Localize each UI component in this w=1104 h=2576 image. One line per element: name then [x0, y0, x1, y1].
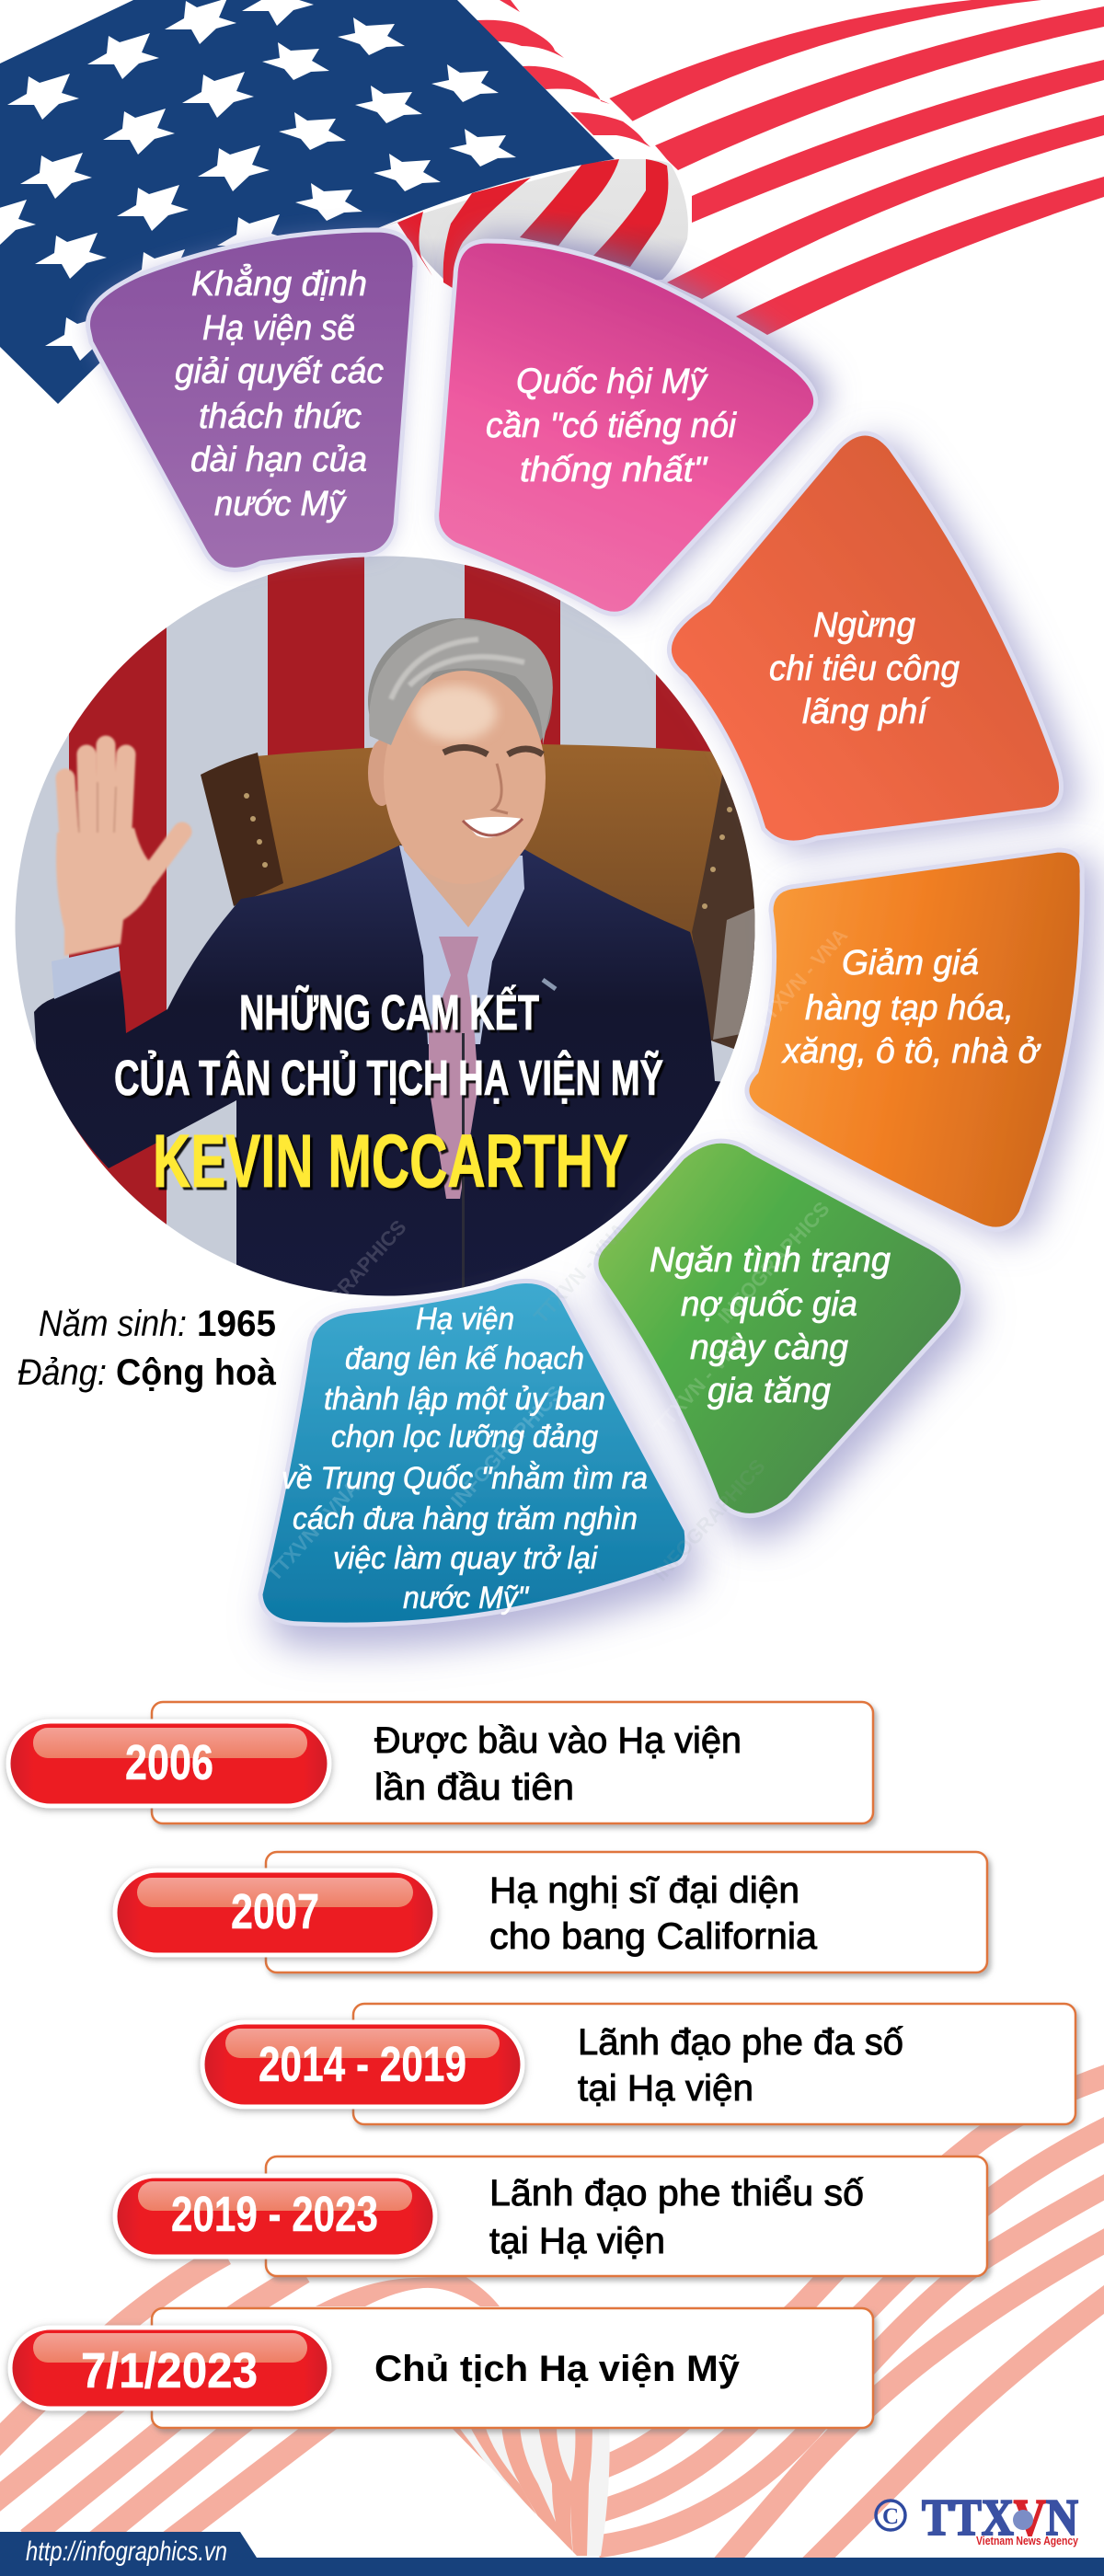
panel: purple — [87, 230, 415, 569]
flag canton with stars — [0, 0, 615, 404]
panel: purple: thách thức — [199, 397, 362, 436]
panel: red-orange: chi tiêu công — [769, 650, 960, 688]
timeline row 2006: Được bầu vào Hạ viện — [374, 1720, 742, 1761]
timeline row 7/1/2023 — [10, 2308, 873, 2428]
birth year and party: Năm sinh: — [39, 1304, 187, 1344]
title: KEVIN MCCARTHY — [153, 1120, 628, 1203]
panel: red-orange: lãng phí — [802, 693, 930, 731]
panel: purple: Hạ viện sẽ — [202, 309, 355, 348]
timeline row 2014-2019: tại Hạ viện — [578, 2068, 753, 2109]
man in suit — [34, 845, 721, 1295]
panel: blue: việc làm quay trở lại — [333, 1541, 598, 1576]
timeline row 2014-2019: 2014 - 2019 — [259, 2037, 466, 2092]
logo TTXVN: TTXVN — [922, 2490, 1078, 2547]
panel: pink: Quốc hội Mỹ — [516, 362, 708, 401]
flag stripes top right — [607, 0, 1104, 335]
watermarks: INFOGRAPHICS — [649, 1455, 770, 1585]
raised hand — [56, 745, 182, 956]
chair — [201, 744, 759, 1058]
footer bar — [0, 2532, 1104, 2576]
panel: pink — [437, 241, 816, 614]
panel: purple: dài hạn của — [190, 441, 367, 479]
panel: blue: Hạ viện — [416, 1302, 514, 1337]
birth year and party — [17, 1304, 277, 1393]
portrait circle — [0, 552, 773, 1306]
panel: blue: thành lập một ủy ban — [324, 1382, 605, 1417]
watermarks: TTXVN - VNA — [649, 1328, 751, 1438]
panel: blue: cách đưa hàng trăm nghìn — [293, 1501, 638, 1536]
title: NHỮNG CAM KẾT — [239, 985, 539, 1041]
logo TTXVN: C — [882, 2504, 899, 2529]
footer bar: http://infographics.vn — [26, 2536, 227, 2567]
panel: purple: Khẳng định — [191, 263, 367, 304]
timeline row 7/1/2023: 7/1/2023 — [81, 2343, 258, 2398]
timeline row 2006: 2006 — [125, 1735, 213, 1790]
panel: pink: cần "có tiếng nói — [486, 407, 738, 445]
timeline row 2006 — [8, 1702, 873, 1823]
panel: green: ngày càng — [690, 1328, 848, 1367]
flag ribbon fold — [457, 0, 670, 163]
birth year and party: Cộng hoà — [116, 1352, 277, 1393]
panel: green — [596, 1141, 963, 1516]
birth year and party: 1965 — [197, 1304, 276, 1344]
panel: purple: giải quyết các — [175, 352, 384, 391]
timeline row 2019-2023: Lãnh đạo phe thiểu số — [489, 2173, 864, 2214]
panel: green: gia tăng — [707, 1372, 831, 1410]
flag rolled bulb — [380, 159, 688, 290]
panel: blue: đang lên kế hoạch — [345, 1341, 584, 1376]
panel: orange: Giảm giá — [842, 944, 979, 983]
timeline row 2007: cho bang California — [489, 1916, 818, 1957]
panel: pink: thống nhất" — [520, 451, 708, 489]
panel: blue: nước Mỹ" — [403, 1581, 530, 1616]
watermarks: INFOGRAPHICS — [713, 1197, 834, 1328]
panel: red-orange — [669, 433, 1062, 843]
logo TTXVN: Vietnam News Agency — [976, 2534, 1079, 2547]
panel: orange: hàng tạp hóa, — [805, 989, 1014, 1028]
panel: blue — [260, 1281, 687, 1625]
timeline row 2019-2023: tại Hạ viện — [489, 2221, 665, 2261]
timeline row 2019-2023: 2019 - 2023 — [171, 2187, 378, 2242]
panel: green: nợ quốc gia — [681, 1285, 857, 1324]
timeline row 2014-2019: Lãnh đạo phe đa số — [578, 2022, 903, 2063]
watermarks: TTXVN - VNA — [529, 1218, 631, 1328]
panel: blue: về Trung Quốc "nhằm tìm ra — [282, 1461, 648, 1496]
panel: purple: nước Mỹ — [214, 485, 347, 523]
title — [114, 985, 663, 1203]
timeline row 7/1/2023: Chủ tịch Hạ viện Mỹ — [374, 2349, 741, 2389]
watermarks: TTXVN - VNA — [262, 1476, 364, 1585]
timeline row 2007: 2007 — [231, 1884, 319, 1939]
timeline row 2007 — [115, 1852, 987, 1972]
timeline row 2007: Hạ nghị sĩ đại diện — [489, 1870, 799, 1911]
timeline row 2006: lần đầu tiên — [374, 1767, 574, 1808]
background stripes bottom — [0, 2074, 1104, 2571]
timeline row 2019-2023 — [115, 2156, 987, 2276]
watermarks: TTXVN - VNA — [750, 924, 852, 1033]
watermarks: INFOGRAPHICS — [446, 1381, 568, 1512]
watermarks — [262, 924, 852, 1585]
birth year and party: Đảng: — [17, 1352, 107, 1393]
title: CỦA TÂN CHỦ TỊCH HẠ VIỆN MỸ — [114, 1050, 663, 1106]
panel: red-orange: Ngừng — [813, 606, 915, 645]
timeline row 2014-2019 — [202, 2004, 1075, 2124]
head — [368, 618, 553, 884]
panel: green: Ngăn tình trạng — [650, 1241, 891, 1280]
panel: orange — [747, 850, 1082, 1229]
panel: blue: chọn lọc lưỡng đảng — [331, 1420, 598, 1455]
background ribbon fold bottom — [453, 2429, 610, 2556]
watermarks: INFOGRAPHICS — [290, 1215, 411, 1346]
panel: orange: xăng, ô tô, nhà ở — [781, 1032, 1041, 1071]
